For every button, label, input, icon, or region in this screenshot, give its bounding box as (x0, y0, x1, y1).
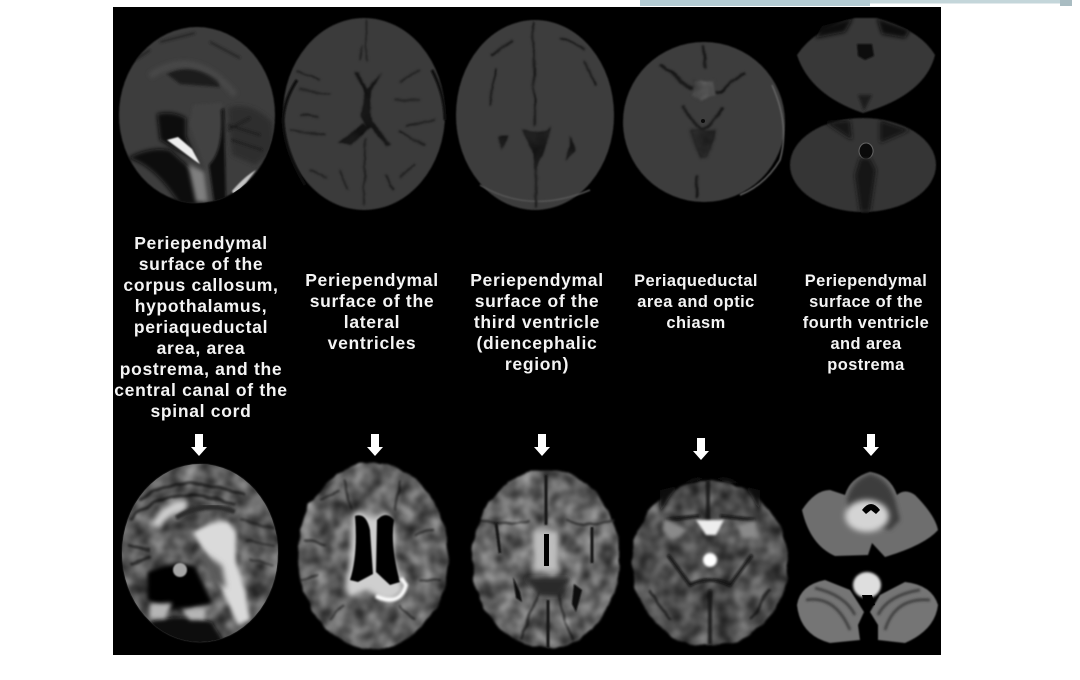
label: third ventricle column: (diencephalic (477, 333, 597, 353)
label: fourth ventricle column: Periependymal (805, 272, 927, 290)
T1 brain: axial third ventricle (456, 20, 614, 210)
label: lateral ventricles column: Periependymal (305, 270, 439, 290)
label: third ventricle column (470, 270, 604, 374)
top header strip (640, 0, 1072, 6)
label: lateral ventricles column (305, 270, 439, 353)
label: fourth ventricle column: postrema (827, 356, 905, 374)
FLAIR brain: axial third ventricle (472, 470, 620, 648)
label: fourth ventricle column: fourth ventricle (803, 314, 929, 332)
label: corpus callosum column: area, area (157, 338, 245, 358)
label: periaqueductal column (634, 272, 758, 332)
label: corpus callosum column: corpus callosum, (123, 275, 279, 295)
label: lateral ventricles column: surface of the (310, 291, 434, 311)
T1 brain: axial periaqueductal (623, 42, 785, 202)
label: fourth ventricle column (803, 272, 929, 374)
arrow 5 (863, 434, 879, 456)
label: corpus callosum column: Periependymal (134, 233, 268, 253)
FLAIR brain: sagittal view (120, 460, 280, 652)
label: lateral ventricles column: lateral (344, 312, 400, 332)
label: corpus callosum column: spinal cord (150, 401, 252, 421)
arrow 1 (191, 434, 207, 456)
black figure panel (113, 7, 941, 655)
label: lateral ventricles column: ventricles (328, 333, 416, 353)
label: third ventricle column: surface of the (475, 291, 599, 311)
arrow 3 (534, 434, 550, 456)
arrow 4 (693, 438, 709, 460)
arrow 2 (367, 434, 383, 456)
label: corpus callosum column: postrema, and the (120, 359, 282, 379)
label: corpus callosum column: surface of the (139, 254, 263, 274)
FLAIR brain: axial periaqueductal (632, 477, 788, 646)
label: corpus callosum column: periaqueductal (134, 317, 268, 337)
T1 brain: axial lateral ventricles (283, 18, 445, 210)
label: fourth ventricle column: surface of the (809, 293, 923, 311)
label: third ventricle column: third ventricle (474, 312, 600, 332)
T1 brain: posterior fossa sections (790, 18, 936, 212)
label: periaqueductal column: Periaqueductal (634, 272, 758, 290)
FLAIR brain: axial lateral ventricles (298, 463, 448, 649)
label: corpus callosum column (114, 233, 288, 421)
label: periaqueductal column: chiasm (666, 314, 726, 332)
label: third ventricle column: region) (505, 354, 569, 374)
FLAIR brain: posterior fossa sections (797, 472, 938, 643)
label: third ventricle column: Periependymal (470, 270, 604, 290)
label: periaqueductal column: area and optic (637, 293, 755, 311)
label: corpus callosum column: hypothalamus, (135, 296, 267, 316)
label: corpus callosum column: central canal of the (114, 380, 288, 400)
T1 brain: sagittal view (119, 27, 275, 205)
label: fourth ventricle column: and area (830, 335, 902, 353)
